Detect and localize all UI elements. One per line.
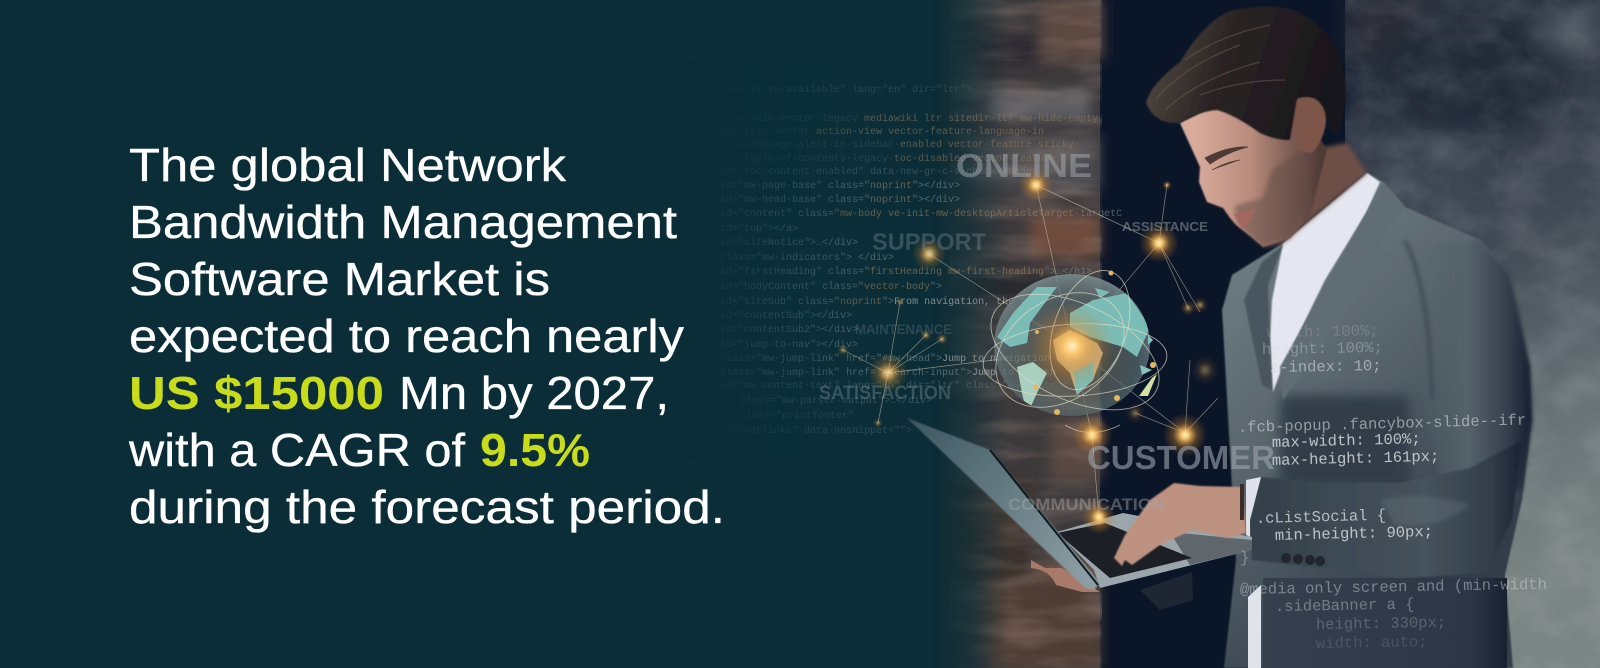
code overlay: faint HTML source text: id="mw-head-base" class="noprint"></div> [720, 194, 960, 206]
label: communication: COMMUNICATION [1008, 495, 1165, 514]
lower jacket [1263, 578, 1507, 668]
code overlay on suit: height: 330px; [1316, 614, 1446, 634]
code overlay: faint HTML source text: class="mw-parser-output">…</div> [740, 395, 932, 407]
globe [982, 270, 1168, 433]
code overlay on suit: min-height: 90px; [1275, 523, 1433, 545]
sleeve shading [1415, 240, 1532, 490]
shirt cuff [1246, 477, 1261, 537]
glowing network nodes [837, 168, 1219, 534]
base underside shading [1170, 532, 1252, 565]
background photo: brick wall, dark doorway and concrete wall [930, 0, 1600, 668]
code overlay on suit: max-width: 100%; [1272, 430, 1421, 452]
background: teal blend bands fading the photo into the panel [690, 0, 1010, 668]
laptop base [1057, 513, 1252, 588]
neck [1263, 143, 1367, 247]
label: assistance: ASSISTANCE [1122, 219, 1208, 234]
code overlay on suit: } [1240, 549, 1249, 567]
code overlay: faint HTML source text: id="mw-page-base" class="noprint"></div> [720, 180, 960, 192]
code overlay: faint HTML source text: ure-table-of-contents-legacy-toc-disabled vector-feature [720, 153, 1056, 165]
code overlay on suit: .sideBanner a { [1275, 596, 1415, 616]
headline text [128, 139, 725, 533]
code overlay: faint HTML source text: id="mw-content-text" lang="en" dir="ltr" class="mw-content [720, 380, 1068, 392]
ear [1294, 96, 1326, 153]
code overlay on suit: .fcb-popup .fancybox-slide--ifr [1238, 411, 1526, 437]
code overlay: faint HTML source text: id="siteNotice">…</div> [720, 237, 858, 249]
code overlay: faint HTML source text: id="catlinks" data-nosnippet=""> [720, 425, 912, 437]
left lapel shadow [1244, 245, 1283, 390]
jacket buttons [1281, 553, 1325, 566]
orbit nodes [1034, 270, 1156, 415]
forearm and hand [1246, 440, 1522, 578]
code overlay: faint HTML source text: id="jump-to-nav"></div> [720, 339, 858, 351]
wrist watch strap [1240, 484, 1244, 520]
code overlay: faint HTML source text: id="siteSub" class="noprint">From navigation, the free [720, 296, 1044, 308]
hair strands [1155, 25, 1285, 110]
code overlay left fade [690, 60, 880, 460]
face [1180, 95, 1327, 247]
orbit rings [973, 259, 1177, 434]
laptop lid [907, 418, 1100, 590]
continents [997, 287, 1150, 415]
code overlay: faint HTML source text: ient-js ve-available" lang="en" dir="ltr"> [720, 84, 972, 96]
chest shadow [1280, 395, 1410, 490]
code overlay: faint HTML source text: class="printfooter" [740, 410, 854, 422]
laptop [907, 418, 1252, 610]
code overlay: faint HTML source text: class="mw-jump-link" href="#search-input">Jump to search [720, 367, 1056, 379]
code overlay: faint HTML source text: id="contentSub2"></div> [720, 324, 858, 336]
lower shirt [1248, 585, 1261, 668]
code overlay: faint HTML source text: class="mw-indicators"> </div> [720, 252, 894, 264]
label: online: ONLINE [956, 147, 1092, 184]
code overlay: faint HTML source text: ure-toc-content-enabled" data-new-gr-c-s-check-loaded [720, 166, 1038, 178]
code overlay: faint HTML source text: ure-language-alert-in-sidebar-enabled vector-feature-sticky- [720, 139, 1080, 151]
lips [1233, 208, 1256, 228]
headline text: during the forecast period. [129, 481, 725, 533]
code overlay on suit: @media only screen and (min-width [1240, 576, 1547, 599]
code overlay: faint HTML source text: ook skin-vector action-view vector-feature-language-in [720, 126, 1044, 138]
highlighted value: US $15000: US $15000 [129, 367, 384, 419]
code overlay on suit: height: 100%; [1262, 339, 1383, 359]
code overlay: faint HTML source text: class="mw-jump-link" href="#mw-head">Jump to navigation [720, 353, 1050, 365]
label: satisfaction: SATISFACTION [819, 383, 951, 404]
headline text: Software Market is [129, 253, 550, 305]
headline text: expected to reach nearly [129, 310, 685, 362]
code overlay: faint HTML source text: id="content" class="mw-body ve-init-mw-desktopArticleTarget-targetC [720, 208, 1122, 220]
code overlay on suit: width: 100%; [1267, 322, 1379, 342]
sleeve folds [1380, 496, 1470, 526]
supporting fingers under laptop [1031, 560, 1100, 592]
closed eye and brow [1205, 147, 1248, 170]
code overlay on suit: z-index: 10; [1270, 357, 1382, 377]
shirt [1270, 173, 1380, 392]
sleeve seam [1405, 240, 1432, 400]
code overlay on suit [1238, 322, 1547, 653]
keyboard [1057, 523, 1192, 578]
left cuff and dark sleeve [1140, 572, 1193, 610]
label: support: SUPPORT [872, 229, 986, 256]
lid edge [990, 450, 1098, 585]
beard shadow [1234, 152, 1312, 247]
label: maintenance: MAINTENANCE [855, 322, 952, 337]
network lines [843, 185, 1218, 517]
continent islands [1139, 335, 1157, 396]
code overlay: faint HTML source text: id="firstHeading" class="firstHeading mw-first-heading">…</h1> [720, 266, 1092, 278]
headline text: with a CAGR of [128, 424, 465, 476]
code overlay: faint HTML source text: id="top"></a> [720, 223, 798, 235]
label: customer: CUSTOMER [1087, 439, 1275, 476]
code overlay: faint HTML source text [720, 84, 1122, 437]
forearm sleeve [1250, 440, 1522, 578]
suit jacket body [1222, 173, 1532, 668]
code overlay on suit: width: auto; [1316, 633, 1428, 653]
code overlay: faint HTML source text: id="bodyContent" class="vector-body"> [720, 281, 942, 293]
code overlay: faint HTML source text: ass="skin-vector-legacy mediawiki ltr sitedir-ltr mw-hide-empty [720, 113, 1098, 125]
code overlay: faint HTML source text: id="contentSub"></div> [720, 310, 852, 322]
typing hand [1114, 483, 1246, 566]
right lapel [1280, 182, 1405, 400]
globe sphere [994, 274, 1150, 416]
network keyword labels [819, 147, 1275, 514]
code overlay on suit: .cListSocial { [1256, 507, 1386, 528]
headline text: Bandwidth Management [129, 196, 677, 248]
highlighted value: 9.5%: 9.5% [480, 424, 590, 476]
businessman: jacket, shirt, head and hair [1146, 7, 1532, 668]
hair [1146, 7, 1346, 140]
headline text: The global Network [129, 139, 567, 191]
code overlay on suit: max-height: 161px; [1272, 448, 1440, 470]
headline text: Mn by 2027, [399, 367, 669, 419]
